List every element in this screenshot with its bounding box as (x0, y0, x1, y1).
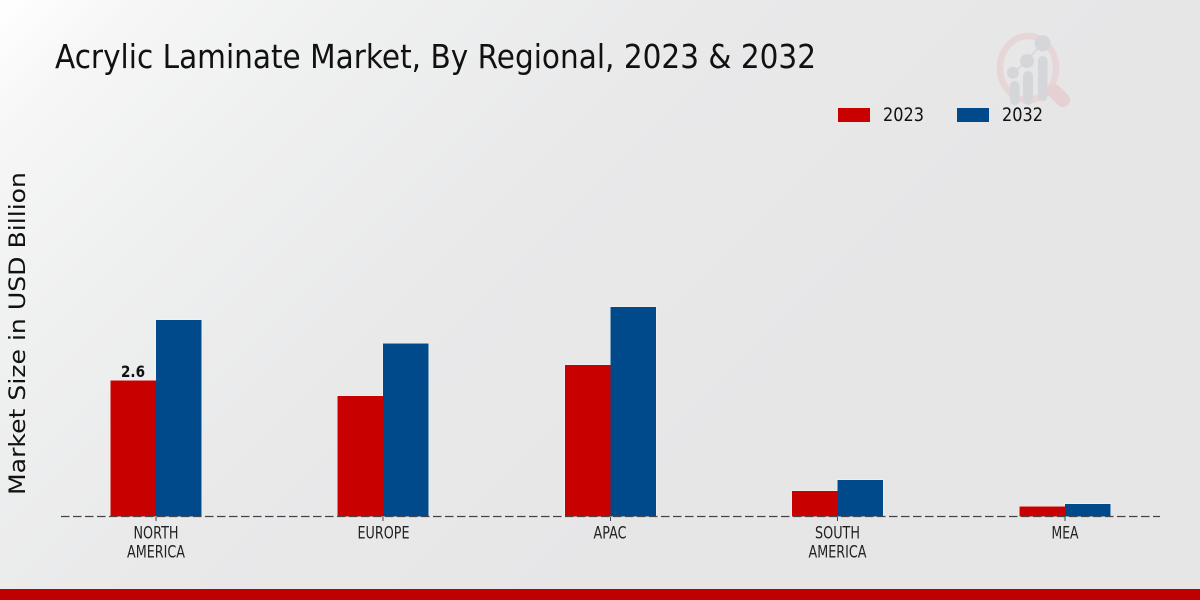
bars: North America (110, 320, 202, 516)
bar chart (61, 307, 1160, 562)
category labels: APAC (594, 524, 626, 542)
y axis label: Market Size in USD Billion (5, 172, 31, 495)
category labels: NORTH (134, 524, 178, 542)
category labels: AMERICA (808, 542, 867, 562)
legend: 2023 (883, 104, 924, 126)
bars: MEA (1020, 504, 1110, 516)
category labels (127, 524, 1079, 562)
bars: South America (792, 480, 883, 516)
category labels: AMERICA (127, 542, 186, 562)
title: Acrylic Laminate Market, By Regional, 2023 & 2032 (55, 37, 816, 76)
footer bar (0, 589, 1200, 600)
category labels: SOUTH (815, 524, 860, 542)
category labels: MEA (1052, 524, 1079, 542)
watermark logo (1000, 35, 1063, 105)
value label: 2.6 (121, 362, 145, 381)
legend (838, 104, 1043, 126)
legend: 2032 (1002, 104, 1043, 126)
category labels: EUROPE (358, 524, 410, 542)
bars: APAC (565, 307, 656, 516)
bars: Europe (338, 344, 428, 516)
